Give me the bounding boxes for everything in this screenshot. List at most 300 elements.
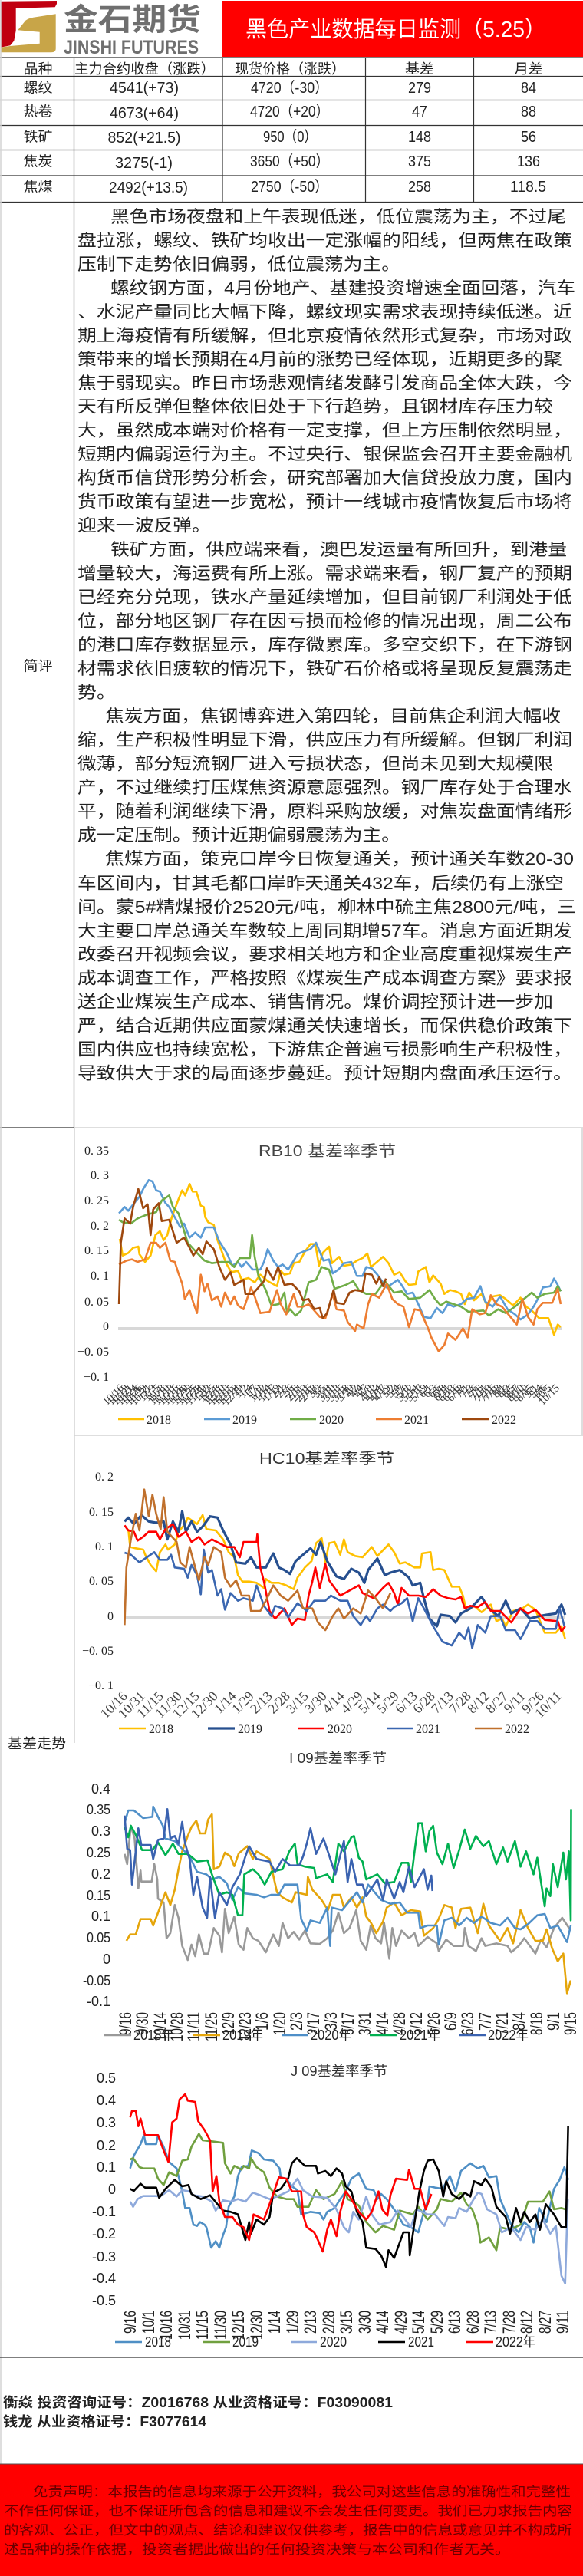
row: rebar: 279 <box>408 80 431 97</box>
x axis date labels: 10/5 <box>533 1382 555 1404</box>
x axis date labels: 3/17 <box>338 2012 357 2035</box>
row: iron ore: 铁矿 <box>23 129 52 144</box>
x axis date labels: 7/28 <box>499 2311 519 2334</box>
row: coking coal: 焦煤 <box>23 180 52 195</box>
x axis date labels: 1/12 <box>248 1382 269 1404</box>
x axis date labels: 7/13 <box>481 2311 500 2334</box>
series 2019 <box>130 2134 565 2250</box>
x axis date labels: 9/16 <box>116 2012 135 2035</box>
paragraph: coking coal: 车区间内，甘其毛都口岸昨天通关432车，后续仍有上涨空 <box>77 874 564 893</box>
x axis date labels: 12/30 <box>247 2311 266 2340</box>
x axis date labels: 6/11 <box>432 1382 453 1404</box>
x axis date labels: 1/9 <box>247 1382 265 1400</box>
y axis labels: 0.35 <box>87 1802 110 1817</box>
x axis date labels: 9/11 <box>553 2311 572 2334</box>
x axis date labels: 8/27 <box>483 1688 511 1716</box>
row: hot coil: 热卷 <box>23 104 52 120</box>
series 2021 <box>119 1243 561 1352</box>
x axis date labels: 6/23 <box>458 2012 477 2035</box>
y axis labels <box>77 1145 109 1384</box>
y axis labels: 0.2 <box>91 1866 110 1882</box>
legend: 2021 <box>408 2334 434 2350</box>
legend <box>104 2028 529 2043</box>
x axis date labels: 11/3 <box>137 1382 159 1404</box>
y axis labels: 0. 05 <box>84 1296 109 1309</box>
legend: 2018 <box>145 2334 171 2350</box>
legend: 2021年 <box>400 2028 440 2043</box>
x axis date labels: 12/15 <box>170 1688 203 1721</box>
x axis date labels: 11/13 <box>152 1382 177 1408</box>
x axis date labels: 11/25 <box>175 1382 200 1408</box>
paragraph: coke <box>77 707 572 845</box>
x axis date labels: 8/5 <box>500 1382 518 1400</box>
x axis date labels: 12/3 <box>193 1382 214 1404</box>
paragraph: iron ore: 材需求依旧疲软的情况下，铁矿石价格或将呈现反复震荡走 <box>77 659 572 678</box>
x axis date labels: 3/31 <box>355 2012 374 2035</box>
x axis date labels: 2/16 <box>294 1382 315 1404</box>
x axis date labels: 2/3 <box>287 2012 306 2031</box>
x axis date labels: 12/15 <box>212 1382 237 1408</box>
y axis labels: 0.4 <box>97 2093 116 2108</box>
x axis date labels: 5/7 <box>390 1382 407 1400</box>
x axis date labels: 3/30 <box>301 1688 330 1716</box>
y axis labels: 0.2 <box>97 2138 116 2153</box>
y axis labels: 0. 05 <box>89 1575 114 1588</box>
y axis labels: 0.5 <box>97 2070 116 2086</box>
y axis labels: 0. 15 <box>84 1244 109 1257</box>
x axis date labels: 10/31 <box>115 1688 148 1721</box>
x axis date labels: 2/3 <box>275 1382 292 1400</box>
x axis date labels: 12/10 <box>203 1382 228 1408</box>
x axis date labels: 3/5 <box>311 1382 329 1400</box>
x axis date labels: 3/10 <box>317 1382 338 1404</box>
paragraph: coking coal <box>77 849 576 1083</box>
paragraph: coking coal: 送企业煤炭生产成本、销售情况。煤价调控预计进一步加 <box>77 993 553 1011</box>
x axis date labels <box>120 2311 572 2340</box>
x axis date labels: 12/15 <box>229 2311 248 2340</box>
chart title: RB10 基差率季节 <box>259 1142 396 1160</box>
y axis labels <box>82 1471 114 1692</box>
x axis date labels: 9/26 <box>519 1688 547 1716</box>
x axis date labels: 11/30 <box>184 1382 209 1408</box>
x axis date labels: 6/16 <box>441 1382 463 1404</box>
x axis date labels: 10/1 <box>139 2311 158 2334</box>
series 2020 <box>124 1807 571 1946</box>
x axis date labels: 10/15 <box>537 1382 562 1408</box>
x axis date labels: 3/15 <box>326 1382 347 1404</box>
x axis date labels: 10/31 <box>129 1382 154 1408</box>
x axis date labels <box>101 1382 562 1408</box>
paragraph: iron ore: 位，部分地区钢厂存在因亏损而检修的情况出现，周二公布 <box>77 611 572 631</box>
x axis date labels: 6/28 <box>410 1688 438 1716</box>
legend: 2022年 <box>488 2028 529 2043</box>
row: rebar: 4720（-30） <box>251 79 328 97</box>
x axis date labels: 12/13 <box>207 1382 232 1408</box>
row: hot coil: 47 <box>412 104 427 120</box>
x axis date labels: 6/13 <box>445 2311 464 2334</box>
y axis labels: 0. 3 <box>91 1169 109 1182</box>
x axis date labels: 10/28 <box>167 2012 186 2041</box>
y axis labels: 0. 2 <box>91 1220 109 1233</box>
x axis date labels: 11/28 <box>180 1382 205 1408</box>
x axis date labels: 11/30 <box>152 1688 185 1721</box>
x axis date labels: 12/9 <box>219 2012 238 2035</box>
y axis labels: 0. 15 <box>89 1506 114 1519</box>
paragraph: coking coal: 改委召开视频会议，要求相关地方和企业高度重视煤炭生产 <box>77 945 572 964</box>
x axis date labels: 10/26 <box>120 1382 145 1408</box>
legend <box>115 2334 535 2350</box>
y axis labels: 0.4 <box>91 1781 110 1797</box>
legend: 2022年 <box>496 2334 535 2350</box>
y axis labels: -0.3 <box>92 2249 116 2265</box>
series 2018 <box>120 1184 561 1335</box>
paragraph: rebar: 螺纹钢方面，4月份地产、基建投资增速全面回落，汽车 <box>110 278 575 298</box>
x axis date labels: 4/17 <box>367 1382 389 1404</box>
analyst credentials: 衡焱 投资咨询证号：Z0016768 从业资格证号：F03090081 <box>3 2395 393 2410</box>
x axis date labels: 7/13 <box>473 1382 495 1404</box>
x axis date labels: 1/17 <box>257 1382 278 1404</box>
x axis date labels: 4/2 <box>344 1382 361 1400</box>
x axis date labels: 4/29 <box>391 2311 410 2334</box>
disclaimer text: 述品种的操作依据，投资者据此做出的任何投资决策与本公司和作者无关。 <box>4 2542 510 2557</box>
series lines <box>124 1807 571 1993</box>
x axis date labels: 2/18 <box>298 1382 320 1404</box>
paragraph: iron ore: 增量较大，海运费有所上涨。需求端来看，钢厂复产的预期 <box>77 564 572 583</box>
series 2022 <box>124 1490 390 1630</box>
x axis date labels: 7/28 <box>446 1688 474 1716</box>
series 2021 <box>124 1809 571 1920</box>
row: iron ore: 56 <box>521 129 536 146</box>
x axis date labels: 9/30 <box>133 2012 152 2035</box>
x axis date labels: 3/13 <box>321 1382 343 1404</box>
row: coke <box>23 153 540 172</box>
legend: 2020 <box>328 1723 352 1736</box>
paragraph: rebar: 天有所反弹但整体依旧处于下行趋势，且钢材库存压力较 <box>77 397 553 416</box>
analyst credentials: 钱龙 从业资格证号：F3077614 <box>3 2414 206 2429</box>
x axis date labels: 7/8 <box>468 1382 486 1400</box>
x axis date labels: 2/1 <box>270 1382 288 1400</box>
y axis labels: 0 <box>107 1610 114 1623</box>
legend: 2020 <box>319 1414 344 1427</box>
x axis date labels: 3/3 <box>321 2012 341 2031</box>
legend: 2019 <box>238 1723 262 1736</box>
analyst credentials <box>3 2395 393 2429</box>
x axis date labels: 4/28 <box>390 2012 409 2035</box>
basis trend label: 基差走势 <box>8 1736 66 1751</box>
logo wordmark: 金石期货 <box>64 3 201 37</box>
paragraph: coke: 成一定压制。预计近期偏弱震荡为主。 <box>77 825 400 845</box>
row: rebar <box>23 79 536 97</box>
row: hot coil: 88 <box>521 104 536 120</box>
row: iron ore: 950（0） <box>263 128 317 146</box>
x axis date labels: 7/7 <box>476 2012 495 2031</box>
x axis date labels: 12/18 <box>216 1382 242 1408</box>
x axis date labels: 5/14 <box>355 1688 384 1716</box>
header banner <box>1 1 583 58</box>
x axis date labels: 8/4 <box>509 2012 529 2031</box>
x axis date labels: 10/19 <box>106 1382 131 1408</box>
x axis date labels: 1/14 <box>252 1382 274 1404</box>
x axis date labels: 7/6 <box>463 1382 481 1400</box>
x axis date labels: 9/1 <box>523 1382 541 1400</box>
x axis date labels: 4/14 <box>319 1688 347 1716</box>
x axis date labels: 6/18 <box>446 1382 467 1404</box>
chart title: HC10基差率季节 <box>259 1450 394 1468</box>
y axis labels: 0. 35 <box>84 1145 109 1158</box>
y axis labels: 0 <box>103 1320 109 1333</box>
x axis date labels: 3/30 <box>355 2311 374 2334</box>
y axis labels: -0.2 <box>92 2226 116 2242</box>
x axis date labels: 8/18 <box>527 2012 546 2035</box>
paragraph: rebar: 短期内偏弱运行为主。不过央行、银保监会召开主要金融机 <box>77 445 572 463</box>
y axis labels: 0. 2 <box>95 1471 114 1484</box>
y axis labels: 0.1 <box>97 2159 116 2175</box>
title: 黑色产业数据每日监测（5.25） <box>245 17 546 42</box>
x axis date labels: 11/20 <box>166 1382 191 1408</box>
x axis date labels: 11/15 <box>156 1382 182 1408</box>
x axis date labels: 8/15 <box>515 1382 536 1404</box>
paragraph: coke: 微薄，部分短流钢厂进入亏损状态，但尚未见到大规模限 <box>77 754 553 773</box>
x axis date labels: 1/2 <box>233 1382 251 1400</box>
x axis date labels: 6/3 <box>422 1382 440 1400</box>
y axis labels: 0.15 <box>87 1888 110 1903</box>
series 2018 <box>130 2135 568 2248</box>
x axis date labels: 3/8 <box>316 1382 334 1400</box>
x axis date labels: 6/9 <box>441 2012 460 2031</box>
row: coke: 136 <box>517 153 540 170</box>
x axis date labels: 8/12 <box>464 1688 492 1716</box>
paragraph: rebar: 策带来的增长预期在4月前的涨势已经体现，近期更多的聚 <box>77 350 562 369</box>
paragraph: market overview: 盘拉涨，螺纹、铁矿均收出一定涨幅的阳线，但两焦在政策 <box>77 231 572 250</box>
legend: 2019 <box>232 1414 257 1427</box>
row: coking coal <box>23 178 546 196</box>
legend: 2019年 <box>222 2028 263 2043</box>
x axis date labels: 6/6 <box>427 1382 444 1400</box>
x axis date labels: 2/8 <box>284 1382 301 1400</box>
series 2018 <box>128 1515 565 1639</box>
row: hot coil: 4673(+64) <box>110 105 179 122</box>
x axis date labels: 4/14 <box>373 2311 392 2334</box>
table header row: 月差 <box>514 61 543 77</box>
legend: 2020 <box>320 2334 347 2350</box>
x axis date labels: 7/13 <box>428 1688 456 1716</box>
table header row: 基差 <box>405 61 434 77</box>
disclaimer text <box>4 2485 572 2557</box>
paragraph: coking coal: 导致供大于求的局面逐步蔓延。预计短期内盘面承压运行。 <box>77 1063 572 1083</box>
legend: 2021 <box>416 1723 440 1736</box>
series 2020 <box>124 1524 565 1632</box>
y axis labels: 0. 25 <box>84 1194 109 1207</box>
paragraph: rebar: 构货币信贷形势分析会，研究部署加大信贷投放力度，国内 <box>77 468 572 488</box>
x axis date labels: 4/14 <box>373 2012 392 2035</box>
commentary label: 简评 <box>23 658 52 674</box>
x axis date labels: 1/19 <box>262 1382 283 1404</box>
x axis date labels: 1/4 <box>238 1382 255 1400</box>
icon: red logo mark <box>1 1 57 48</box>
series 2021 <box>130 2126 568 2267</box>
y axis labels <box>83 1781 110 2009</box>
x axis date labels: 1/14 <box>211 1688 239 1716</box>
paragraph: coking coal: 严，结合近期供应面蒙煤通关快速增长，而保供稳价政策下 <box>77 1016 572 1036</box>
disclaimer text: 免责声明：本报告的信息均来源于公开资料，我公司对这些信息的准确性和完整性 <box>33 2485 571 2499</box>
x axis date labels: 11/15 <box>193 2311 212 2340</box>
table header row: 品种 <box>23 61 52 77</box>
x axis date labels: 12/23 <box>236 2012 255 2041</box>
row: coking coal: 118.5 <box>510 179 546 196</box>
x axis date labels: 5/4 <box>385 1382 403 1400</box>
x axis date labels: 2/17 <box>304 2012 323 2035</box>
legend: 2020年 <box>311 2028 351 2043</box>
paragraph: iron ore <box>77 540 572 702</box>
x axis date labels: 9/15 <box>561 2012 580 2035</box>
x axis date labels: 5/17 <box>404 1382 426 1404</box>
x axis date labels: 1/29 <box>283 2311 302 2334</box>
x axis date labels: 12/30 <box>188 1688 221 1721</box>
chart: RB10 basis rate <box>77 1142 562 1427</box>
paragraph: rebar: 焦于弱现实。昨日市场悲观情绪发酵引发商品全体大跌，今 <box>77 374 572 393</box>
x axis date labels: 3/15 <box>337 2311 356 2334</box>
series 2020 <box>119 1195 561 1316</box>
y axis labels: -0.05 <box>83 1973 110 1988</box>
y axis labels: 0. 1 <box>91 1270 109 1283</box>
x axis date labels: 12/8 <box>202 1382 223 1404</box>
paragraph: market overview: 黑色市场夜盘和上午表现低迷，低位震荡为主，不过尾 <box>110 207 566 226</box>
row: coke: 焦炭 <box>23 153 52 169</box>
x axis date labels: 5/19 <box>409 1382 430 1404</box>
paragraph: rebar <box>77 278 575 535</box>
row: iron ore: 148 <box>408 129 431 146</box>
x axis date labels: 8/27 <box>535 2311 555 2334</box>
x axis date labels: 4/12 <box>358 1382 380 1404</box>
x axis date labels: 1/14 <box>265 2311 284 2334</box>
paragraph: coke: 焦炭方面，焦钢博弈进入第四轮，目前焦企利润大幅收 <box>105 707 561 726</box>
paragraph: iron ore: 已经充分兑现，铁水产量延续增加，但目前钢厂利润处于低 <box>77 588 572 607</box>
y axis labels: -0.5 <box>92 2293 116 2308</box>
x axis date labels: 10/21 <box>110 1382 136 1408</box>
x axis date labels: 10/24 <box>115 1382 140 1408</box>
row: coking coal: 2750（-50） <box>251 178 328 196</box>
x axis date labels: 8/12 <box>510 1382 532 1404</box>
x axis date labels: 9/1 <box>544 2012 563 2031</box>
chart title: J 09基差率季节 <box>291 2064 387 2079</box>
chart title: I 09基差率季节 <box>289 1751 387 1766</box>
x axis date labels: 2/13 <box>289 1382 311 1404</box>
paragraph: iron ore: 铁矿方面，供应端来看，澳巴发运量有所回升，到港量 <box>110 540 567 559</box>
y axis labels: 0.3 <box>91 1823 110 1839</box>
paragraph: rebar: 迎来一波反弹。 <box>77 516 211 535</box>
y axis labels: -0.4 <box>92 2271 116 2286</box>
x axis date labels: 6/8 <box>431 1382 449 1400</box>
paragraph: rebar: 期上海疫情有所缓解，但北京疫情依然形式复杂，市场对政 <box>77 326 572 345</box>
x axis date labels: 5/2 <box>380 1382 398 1400</box>
title panel <box>222 1 583 57</box>
paragraph: coke: 产，不过继续打压煤焦资源意愿强烈。钢厂库存处于合理水 <box>77 778 572 797</box>
x axis date labels: 11/11 <box>184 2012 203 2041</box>
disclaimer panel <box>0 2464 583 2576</box>
x axis date labels: 7/16 <box>478 1382 499 1404</box>
x axis date labels: 6/13 <box>392 1688 420 1716</box>
x axis date labels: 1/20 <box>270 2012 289 2035</box>
x axis date labels: 10/16 <box>156 2311 176 2340</box>
paragraph: iron ore: 势。 <box>77 683 116 702</box>
chart: HC10 basis rate <box>82 1450 565 1736</box>
x axis date labels: 8/7 <box>505 1382 522 1400</box>
x axis date labels: 11/15 <box>133 1688 166 1721</box>
x axis date labels: 5/9 <box>394 1382 412 1400</box>
x axis date labels: 5/29 <box>427 2311 446 2334</box>
x axis date labels: 10/16 <box>97 1688 130 1721</box>
x axis date labels: 9/11 <box>501 1688 529 1716</box>
paragraph: coke: 平，随着利润继续下滑，原料采购放缓，对焦炭盘面情绪形 <box>77 802 572 821</box>
legend: 2018 <box>149 1723 173 1736</box>
legend: 2022 <box>505 1723 529 1736</box>
x axis date labels: 7/18 <box>483 1382 504 1404</box>
row: hot coil: 4720（+20） <box>250 103 329 120</box>
x axis date labels: 11/25 <box>202 2012 221 2041</box>
legend <box>119 1723 529 1736</box>
legend: 2019 <box>232 2334 259 2350</box>
paragraph: rebar: 货币政策有望进一步宽松，预计一线城市疫情恢复后市场将 <box>77 492 572 511</box>
x axis date labels: 11/5 <box>142 1382 163 1404</box>
x axis date labels: 12/5 <box>197 1382 219 1404</box>
table header row: 现货价格（涨跌） <box>235 61 345 77</box>
y axis labels: 0.1 <box>91 1909 110 1924</box>
x axis date labels: 4/19 <box>372 1382 394 1404</box>
series lines <box>119 1180 561 1352</box>
row: iron ore <box>23 128 536 147</box>
row: coke: 3650（+50） <box>250 153 329 170</box>
x axis date labels: 5/14 <box>400 1382 421 1404</box>
x axis date labels: 5/12 <box>395 1382 417 1404</box>
series 2022 <box>130 2094 431 2252</box>
row: rebar: 84 <box>521 80 536 97</box>
x axis date labels: 3/3 <box>307 1382 324 1400</box>
row: rebar: 螺纹 <box>23 80 52 95</box>
x axis date labels: 2/28 <box>265 1688 293 1716</box>
x axis date labels: 11/23 <box>170 1382 196 1408</box>
series 2019 <box>119 1180 561 1319</box>
row: coke: 3275(-1) <box>115 155 173 172</box>
series 2019 <box>124 1511 565 1626</box>
x axis date labels: 8/12 <box>517 2311 536 2334</box>
series 2022 <box>119 1189 386 1318</box>
logo <box>1 1 201 58</box>
x axis date labels: 12/20 <box>221 1382 246 1408</box>
x axis date labels: 10/16 <box>101 1382 127 1408</box>
y axis labels: 0.25 <box>87 1845 110 1860</box>
icon: gold logo mark <box>1 14 56 52</box>
x axis date labels: 2/28 <box>319 2311 338 2334</box>
x axis date labels: 8/2 <box>496 1382 513 1400</box>
y axis labels: -0.1 <box>92 2204 116 2219</box>
x axis date labels: 5/26 <box>424 2012 443 2035</box>
x axis date labels <box>97 1688 565 1721</box>
paragraph: rebar: 、水泥产量同比大幅下降，螺纹现实需求表现持续低迷。近 <box>77 302 572 321</box>
table header row: 主力合约收盘（涨跌） <box>74 61 215 77</box>
table header row <box>23 61 543 77</box>
y axis labels: 0 <box>103 1952 110 1967</box>
x axis date labels: 3/18 <box>331 1382 352 1404</box>
paragraph: coking coal: 间。蒙5#精煤报价2520元/吨，柳林中硫主焦2800元/吨，三 <box>77 898 576 917</box>
commentary text <box>77 207 576 1083</box>
paragraph: rebar: 大，虽然成本端对价格有一定支撑，但上方压制依然明显， <box>77 420 572 440</box>
y axis labels: 0.05 <box>87 1930 110 1945</box>
legend <box>118 1414 516 1427</box>
y axis labels: 0.3 <box>97 2115 116 2130</box>
x axis date labels: 6/1 <box>417 1382 435 1400</box>
y axis labels: −0. 1 <box>88 1679 114 1692</box>
row: iron ore: 852(+21.5) <box>107 130 181 147</box>
